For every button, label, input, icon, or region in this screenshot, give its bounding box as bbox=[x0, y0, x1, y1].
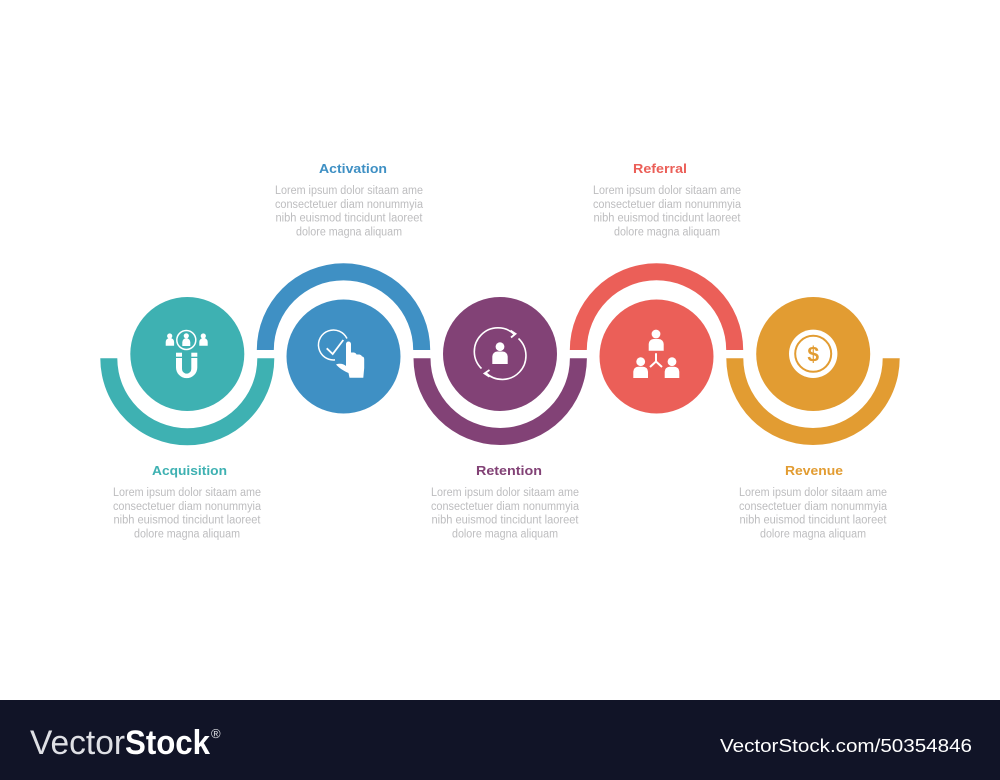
arc: Referral upper arc bbox=[570, 263, 743, 350]
text block: Acquisition description: consectetuer diam nonummyia bbox=[113, 501, 262, 513]
arc: Retention lower arc bbox=[414, 358, 587, 445]
heading: Referral: Referral bbox=[633, 161, 687, 176]
circle: Referral bbox=[600, 300, 714, 414]
circle: Retention bbox=[443, 297, 557, 411]
text block: Acquisition description bbox=[113, 487, 262, 540]
icon: check and pointing hand bbox=[318, 330, 364, 378]
arc: Revenue lower arc bbox=[726, 358, 900, 445]
text block: Activation description: dolore magna aliquam bbox=[296, 226, 402, 238]
text block: Acquisition description: nibh euismod tincidunt laoreet bbox=[114, 514, 261, 526]
step: Acquisition bbox=[100, 297, 274, 540]
text block: Activation description bbox=[275, 185, 424, 238]
step: Retention bbox=[414, 297, 587, 540]
text block: Retention description: dolore magna aliquam bbox=[452, 528, 558, 540]
text block: Revenue description bbox=[739, 487, 888, 540]
step: Revenue bbox=[726, 297, 900, 540]
icon: dollar coin bbox=[789, 330, 837, 378]
text block: Referral description: dolore magna aliquam bbox=[614, 226, 720, 238]
text block: Activation description: Lorem ipsum dolor sitaam ame bbox=[275, 185, 423, 197]
heading: Retention: Retention bbox=[476, 463, 542, 478]
circle: Acquisition bbox=[130, 297, 244, 411]
text block: Acquisition description: dolore magna aliquam bbox=[134, 528, 240, 540]
logo: VectorStock: ® bbox=[211, 726, 221, 741]
text block: Revenue description: Lorem ipsum dolor sitaam ame bbox=[739, 487, 887, 499]
icon: person in cycle arrows bbox=[474, 328, 526, 379]
text block: Activation description: consectetuer diam nonummyia bbox=[275, 199, 424, 211]
image id link text: VectorStock.com/50354846 bbox=[720, 736, 972, 756]
footer banner bbox=[0, 700, 1000, 780]
text block: Referral description: nibh euismod tincidunt laoreet bbox=[594, 212, 741, 224]
text block: Revenue description: nibh euismod tincidunt laoreet bbox=[740, 514, 887, 526]
text block: Activation description: nibh euismod tincidunt laoreet bbox=[276, 212, 423, 224]
arc: Acquisition lower arc bbox=[100, 358, 274, 445]
logo: VectorStock: Stock bbox=[125, 724, 211, 762]
icon: dollar coin: $ bbox=[807, 344, 819, 366]
text block: Retention description: consectetuer diam nonummyia bbox=[431, 501, 580, 513]
circle: Activation bbox=[286, 300, 400, 414]
text block: Retention description: Lorem ipsum dolor sitaam ame bbox=[431, 487, 579, 499]
logo: VectorStock bbox=[30, 724, 221, 762]
text block: Retention description: nibh euismod tincidunt laoreet bbox=[432, 514, 579, 526]
text block: Referral description: Lorem ipsum dolor sitaam ame bbox=[593, 185, 741, 197]
text block: Referral description: consectetuer diam nonummyia bbox=[593, 199, 742, 211]
heading: Revenue: Revenue bbox=[785, 463, 843, 478]
text block: Retention description bbox=[431, 487, 580, 540]
heading: Activation: Activation bbox=[319, 161, 387, 176]
text block: Acquisition description: Lorem ipsum dolor sitaam ame bbox=[113, 487, 261, 499]
step: Referral bbox=[570, 161, 743, 414]
icon: referral people network bbox=[633, 330, 679, 378]
text block: Revenue description: dolore magna aliquam bbox=[760, 528, 866, 540]
step: Activation bbox=[257, 161, 430, 414]
banner background bbox=[0, 700, 1000, 780]
text block: Revenue description: consectetuer diam nonummyia bbox=[739, 501, 888, 513]
circle: Revenue bbox=[756, 297, 870, 411]
logo: VectorStock: Vector bbox=[30, 724, 125, 762]
icon: people and magnet bbox=[166, 330, 208, 378]
heading: Acquisition: Acquisition bbox=[152, 463, 227, 478]
arc: Activation upper arc bbox=[257, 263, 430, 350]
text block: Referral description bbox=[593, 185, 742, 238]
